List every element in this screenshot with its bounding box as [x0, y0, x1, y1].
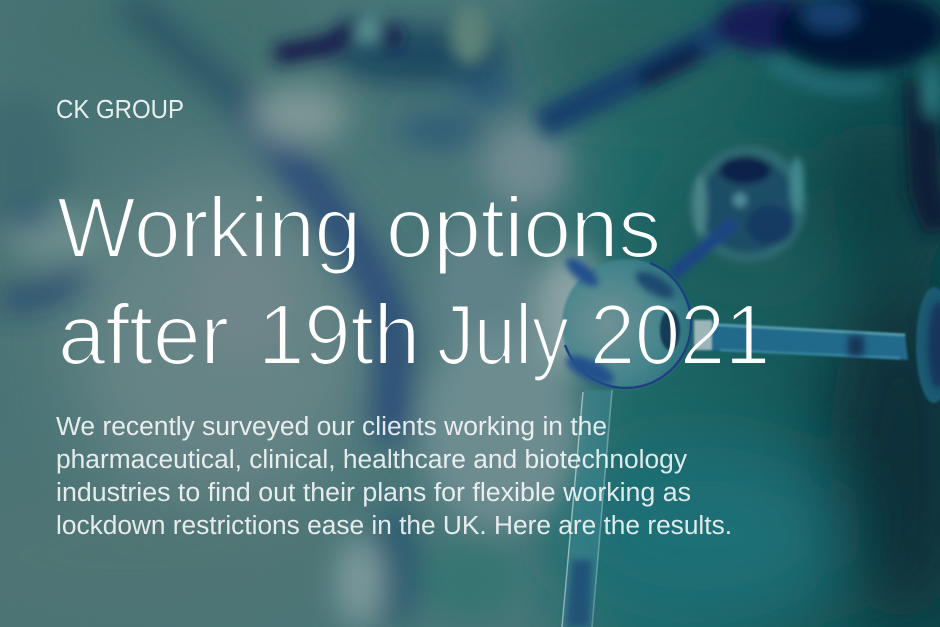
title: 2021	[590, 288, 770, 383]
title: Working	[57, 181, 361, 276]
intro text block: industries to find out their plans for flexible working as	[56, 479, 691, 507]
brand label: CK GROUP: CK GROUP	[56, 96, 184, 124]
small molecule sphere, upper right	[672, 146, 806, 275]
intro text block: pharmaceutical, clinical, healthcare and biotechnology	[56, 446, 687, 474]
title: 19th	[258, 288, 420, 383]
intro text block: lockdown restrictions ease in the UK. Here are the results.	[56, 512, 732, 540]
title: July	[437, 288, 569, 383]
intro text block: We recently surveyed our clients working in the	[56, 413, 607, 441]
intro text block	[56, 413, 732, 540]
title: after	[58, 288, 229, 383]
central molecule sphere and bonds	[562, 253, 940, 627]
title	[57, 181, 770, 383]
title: options	[386, 181, 661, 276]
